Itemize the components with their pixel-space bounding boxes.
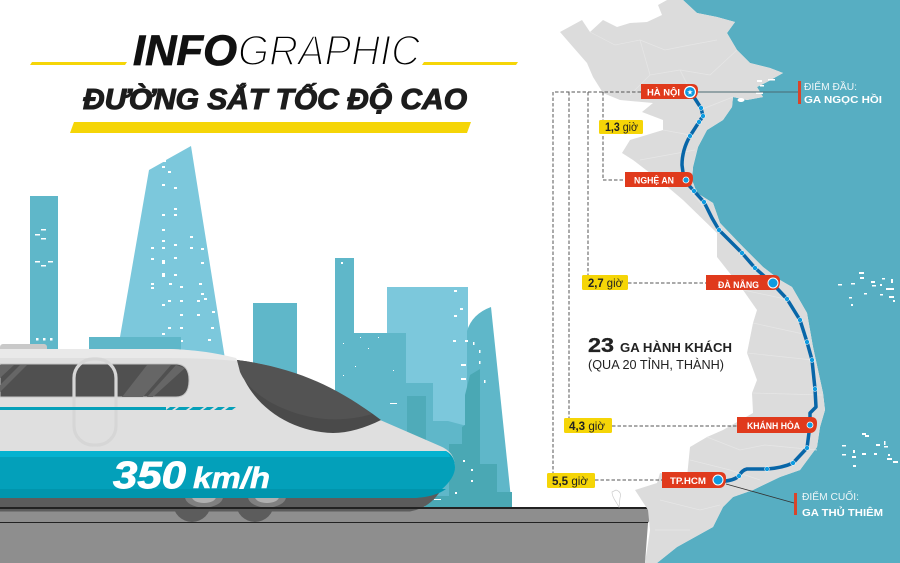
station: Đà Nẵng: ĐÀ NẴNG <box>718 279 759 291</box>
title: infographic <box>30 27 518 75</box>
station: Nghệ An <box>625 172 693 187</box>
station: Hà Nội <box>641 84 698 99</box>
title underline bar <box>70 122 471 133</box>
station: Khánh Hòa <box>737 417 817 433</box>
train underbody <box>0 490 441 512</box>
speed label <box>113 455 270 497</box>
end point note: GA THỦ THIÊM <box>802 506 883 519</box>
windshield <box>237 360 381 433</box>
train lower body <box>0 451 455 498</box>
station: Khánh Hòa: KHÁNH HÒA <box>747 420 800 432</box>
upper wheels <box>185 486 286 508</box>
start point note <box>798 80 882 106</box>
stations summary: GA HÀNH KHÁCH <box>620 340 732 355</box>
map of Vietnam <box>560 0 825 563</box>
dashed time connectors <box>553 92 737 480</box>
start point note: ĐIỂM ĐẦU: <box>804 80 857 93</box>
stations summary <box>588 335 732 372</box>
station: Đà Nẵng <box>706 275 780 291</box>
teal stripe <box>0 407 236 410</box>
station: Hà Nội: HÀ NỘI <box>647 86 680 98</box>
heading: high-speed rail: ĐƯỜNG SẮT TỐC ĐỘ CAO <box>83 82 467 116</box>
railway route <box>682 91 817 481</box>
stations summary: 23 <box>588 335 614 357</box>
islands: Trường Sa <box>842 433 898 467</box>
station: TP.HCM <box>662 472 726 488</box>
station: TP.HCM: TP.HCM <box>670 476 706 487</box>
title: infographic: INFO <box>133 27 237 75</box>
train window <box>0 364 189 397</box>
rail track lines <box>0 507 658 523</box>
high-speed train <box>0 344 455 522</box>
speed label: 350 <box>113 455 186 497</box>
lower wheels <box>173 484 274 522</box>
station: Hà Nội: ★ <box>687 88 693 96</box>
travel time: 1,3 giờ: 1,3 giờ <box>605 122 638 134</box>
callout line: end <box>726 484 794 503</box>
end point note <box>794 489 883 519</box>
start point note: GA NGỌC HỒI <box>804 93 882 106</box>
ground <box>0 508 658 563</box>
sea <box>657 0 900 563</box>
train door <box>74 359 116 445</box>
callout line: start <box>698 91 798 93</box>
station: Nghệ An: NGHỆ AN <box>634 174 674 186</box>
islands: Hoàng Sa <box>838 272 895 306</box>
stations summary: (QUA 20 TỈNH, THÀNH) <box>588 357 724 372</box>
speed label: km/h <box>193 462 270 495</box>
travel time: 4,3 giờ: 4,3 giờ <box>569 419 605 433</box>
end point note: ĐIỂM CUỐI: <box>802 489 859 503</box>
title: infographic: GRAPHIC <box>238 27 421 75</box>
travel time: 2,7 giờ: 2,7 giờ <box>588 276 623 290</box>
city skyline <box>30 146 512 508</box>
travel time: 1,3 giờ <box>599 120 643 134</box>
travel time: 5,5 giờ: 5,5 giờ <box>552 474 588 488</box>
